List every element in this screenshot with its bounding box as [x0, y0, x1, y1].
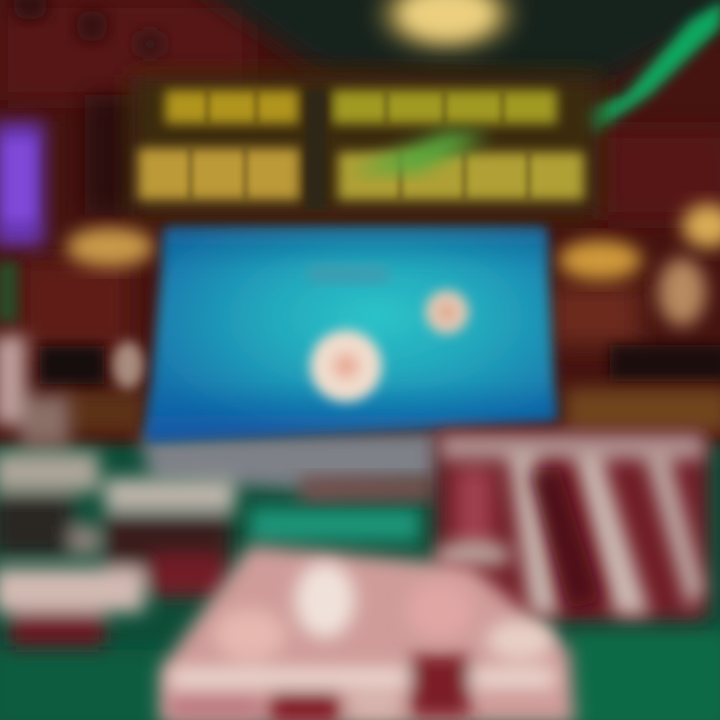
purple screen	[0, 122, 44, 246]
icon: ceiling lamp	[381, 0, 513, 50]
lamp: left	[66, 227, 154, 267]
wooden counter: right	[565, 388, 720, 434]
ceiling: dark panel	[190, 0, 720, 85]
green side panel	[0, 262, 18, 322]
sign: letter gaps	[188, 90, 531, 200]
laptop: lower reflection	[300, 476, 435, 502]
screen: heading glow	[308, 265, 388, 283]
laptop: screen	[146, 228, 556, 440]
sign: centre post	[306, 90, 326, 210]
laptop: base	[140, 432, 440, 490]
sign: bottom line right	[338, 152, 584, 200]
screen: large chip	[310, 330, 382, 402]
white object: left	[112, 341, 144, 389]
chips: front stack	[160, 545, 575, 720]
neon green streak	[575, 0, 720, 135]
dark object: right counter	[610, 345, 720, 381]
laptop	[140, 228, 556, 502]
lamp: lower far right	[658, 258, 706, 326]
sign: green reflection	[350, 132, 490, 172]
sign: top line right	[332, 90, 557, 124]
sign: bottom line left	[138, 148, 300, 200]
chips: right stack	[436, 434, 708, 620]
lamp: far right	[682, 204, 720, 248]
sign: top line left	[165, 90, 299, 124]
dark object: left	[40, 346, 104, 384]
wooden counter: left	[65, 390, 145, 434]
lamp: right	[558, 240, 642, 280]
screen: small chip	[425, 290, 469, 334]
chips: left stack	[0, 335, 235, 646]
table: green felt	[0, 445, 720, 720]
neon sign	[130, 75, 600, 215]
